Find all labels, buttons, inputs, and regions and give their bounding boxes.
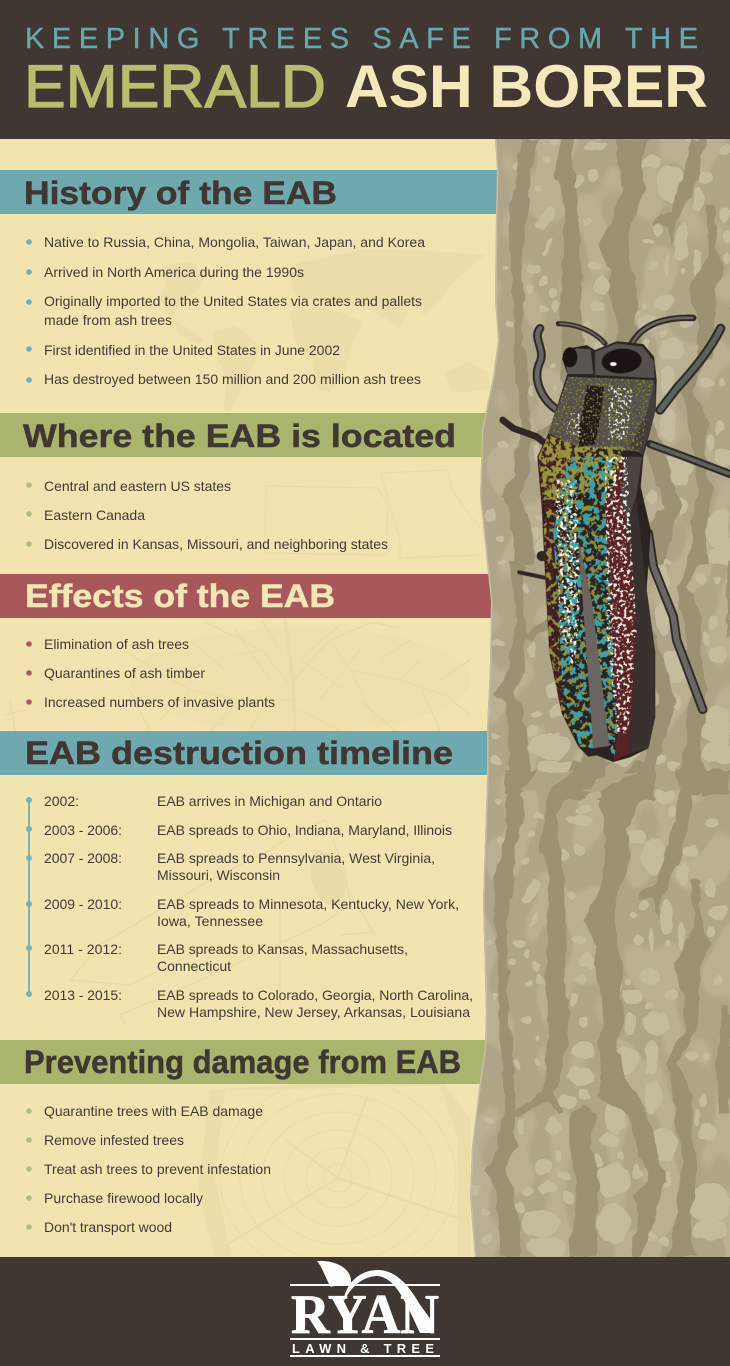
beetle thorax (548, 377, 656, 455)
timeline: 2003 - 2006: (44, 822, 122, 838)
timeline: 2002: (44, 793, 79, 809)
timeline (26, 793, 473, 1020)
timeline: EAB spreads to Pennsylvania, West Virginia, (157, 850, 435, 866)
timeline: New Hampshire, New Jersey, Arkansas, Louisiana (157, 1004, 470, 1020)
timeline axis (26, 797, 32, 997)
list: effects: Elimination of ash trees (44, 636, 189, 652)
timeline: EAB spreads to Kansas, Massachusetts, (157, 941, 408, 957)
title: EMERALD (24, 53, 326, 120)
banner: location: Where the EAB is located (23, 418, 456, 454)
header subtitle: KEEPING TREES SAFE FROM THE (25, 23, 698, 55)
timeline: EAB arrives in Michigan and Ontario (157, 793, 382, 809)
list: history: Arrived in North America during the 1990s (44, 264, 304, 280)
list: effects: Quarantines of ash timber (44, 665, 205, 681)
list: location: Central and eastern US states (44, 478, 231, 494)
list: effects: Increased numbers of invasive plants (44, 694, 275, 710)
list: history: made from ash trees (44, 312, 172, 328)
timeline: Connecticut (157, 958, 231, 974)
list: history: Native to Russia, China, Mongolia, Taiwan, Japan, and Korea (44, 234, 425, 250)
list: prevention (26, 1103, 271, 1235)
list: history: Originally imported to the United States via crates and pallets (44, 293, 422, 309)
bark texture panel (465, 106, 730, 1257)
timeline: Missouri, Wisconsin (157, 867, 280, 883)
logo tagline: LAWN & TREE (292, 1341, 434, 1356)
beetle head and eyes (563, 343, 655, 378)
logo leaf (317, 1261, 351, 1287)
timeline: 2011 - 2012: (44, 941, 122, 957)
banner: history (0, 170, 500, 214)
list: effects (26, 636, 275, 710)
timeline: 2007 - 2008: (44, 850, 122, 866)
banner: effects (0, 574, 500, 618)
watermark: tree rings (198, 1078, 470, 1278)
list: history: Has destroyed between 150 million and 200 million ash trees (44, 371, 421, 387)
list: prevention: Don't transport wood (44, 1219, 172, 1235)
header panel (0, 0, 730, 139)
logo arc (343, 1270, 433, 1333)
timeline: 2013 - 2015: (44, 987, 122, 1003)
banner: location (0, 413, 500, 457)
logo RYAN wordmark: RYAN (291, 1284, 439, 1346)
timeline: EAB spreads to Colorado, Georgia, North Carolina, (157, 987, 473, 1003)
title: ASH BORER (345, 53, 708, 120)
watermark: bare tree (5, 620, 470, 732)
timeline: EAB spreads to Minnesota, Kentucky, New York, (157, 896, 459, 912)
list: history: First identified in the United States in June 2002 (44, 342, 340, 358)
banner: timeline (0, 731, 500, 775)
watermark: Kansas and Missouri outlines (265, 470, 482, 558)
list: location: Discovered in Kansas, Missouri, and neighboring states (44, 536, 388, 552)
watermark: world map (160, 250, 490, 412)
banner: effects: Effects of the EAB (25, 578, 335, 614)
title (24, 53, 708, 120)
timeline: 2009 - 2010: (44, 896, 122, 912)
banner: prevention: Preventing damage from EAB (24, 1044, 461, 1080)
beetle body silhouette (537, 341, 657, 762)
list: prevention: Quarantine trees with EAB damage (44, 1103, 263, 1119)
banner: history: History of the EAB (24, 175, 337, 211)
footer panel (0, 1257, 730, 1366)
list: history (26, 234, 425, 387)
list: prevention: Treat ash trees to prevent infestation (44, 1161, 271, 1177)
list: location: Eastern Canada (44, 507, 145, 523)
list: location (26, 478, 388, 552)
logo: Ryan Lawn & Tree (290, 1261, 440, 1357)
banner: timeline: EAB destruction timeline (25, 735, 453, 771)
beetle wing covers (537, 435, 655, 760)
watermark: beetle outline (70, 820, 375, 1025)
list: prevention: Remove infested trees (44, 1132, 184, 1148)
timeline: Iowa, Tennessee (157, 913, 263, 929)
beetle legs and antennae (503, 318, 730, 709)
beetle illustration (503, 318, 730, 762)
list: prevention: Purchase firewood locally (44, 1190, 203, 1206)
timeline: EAB spreads to Ohio, Indiana, Maryland, Illinois (157, 822, 452, 838)
